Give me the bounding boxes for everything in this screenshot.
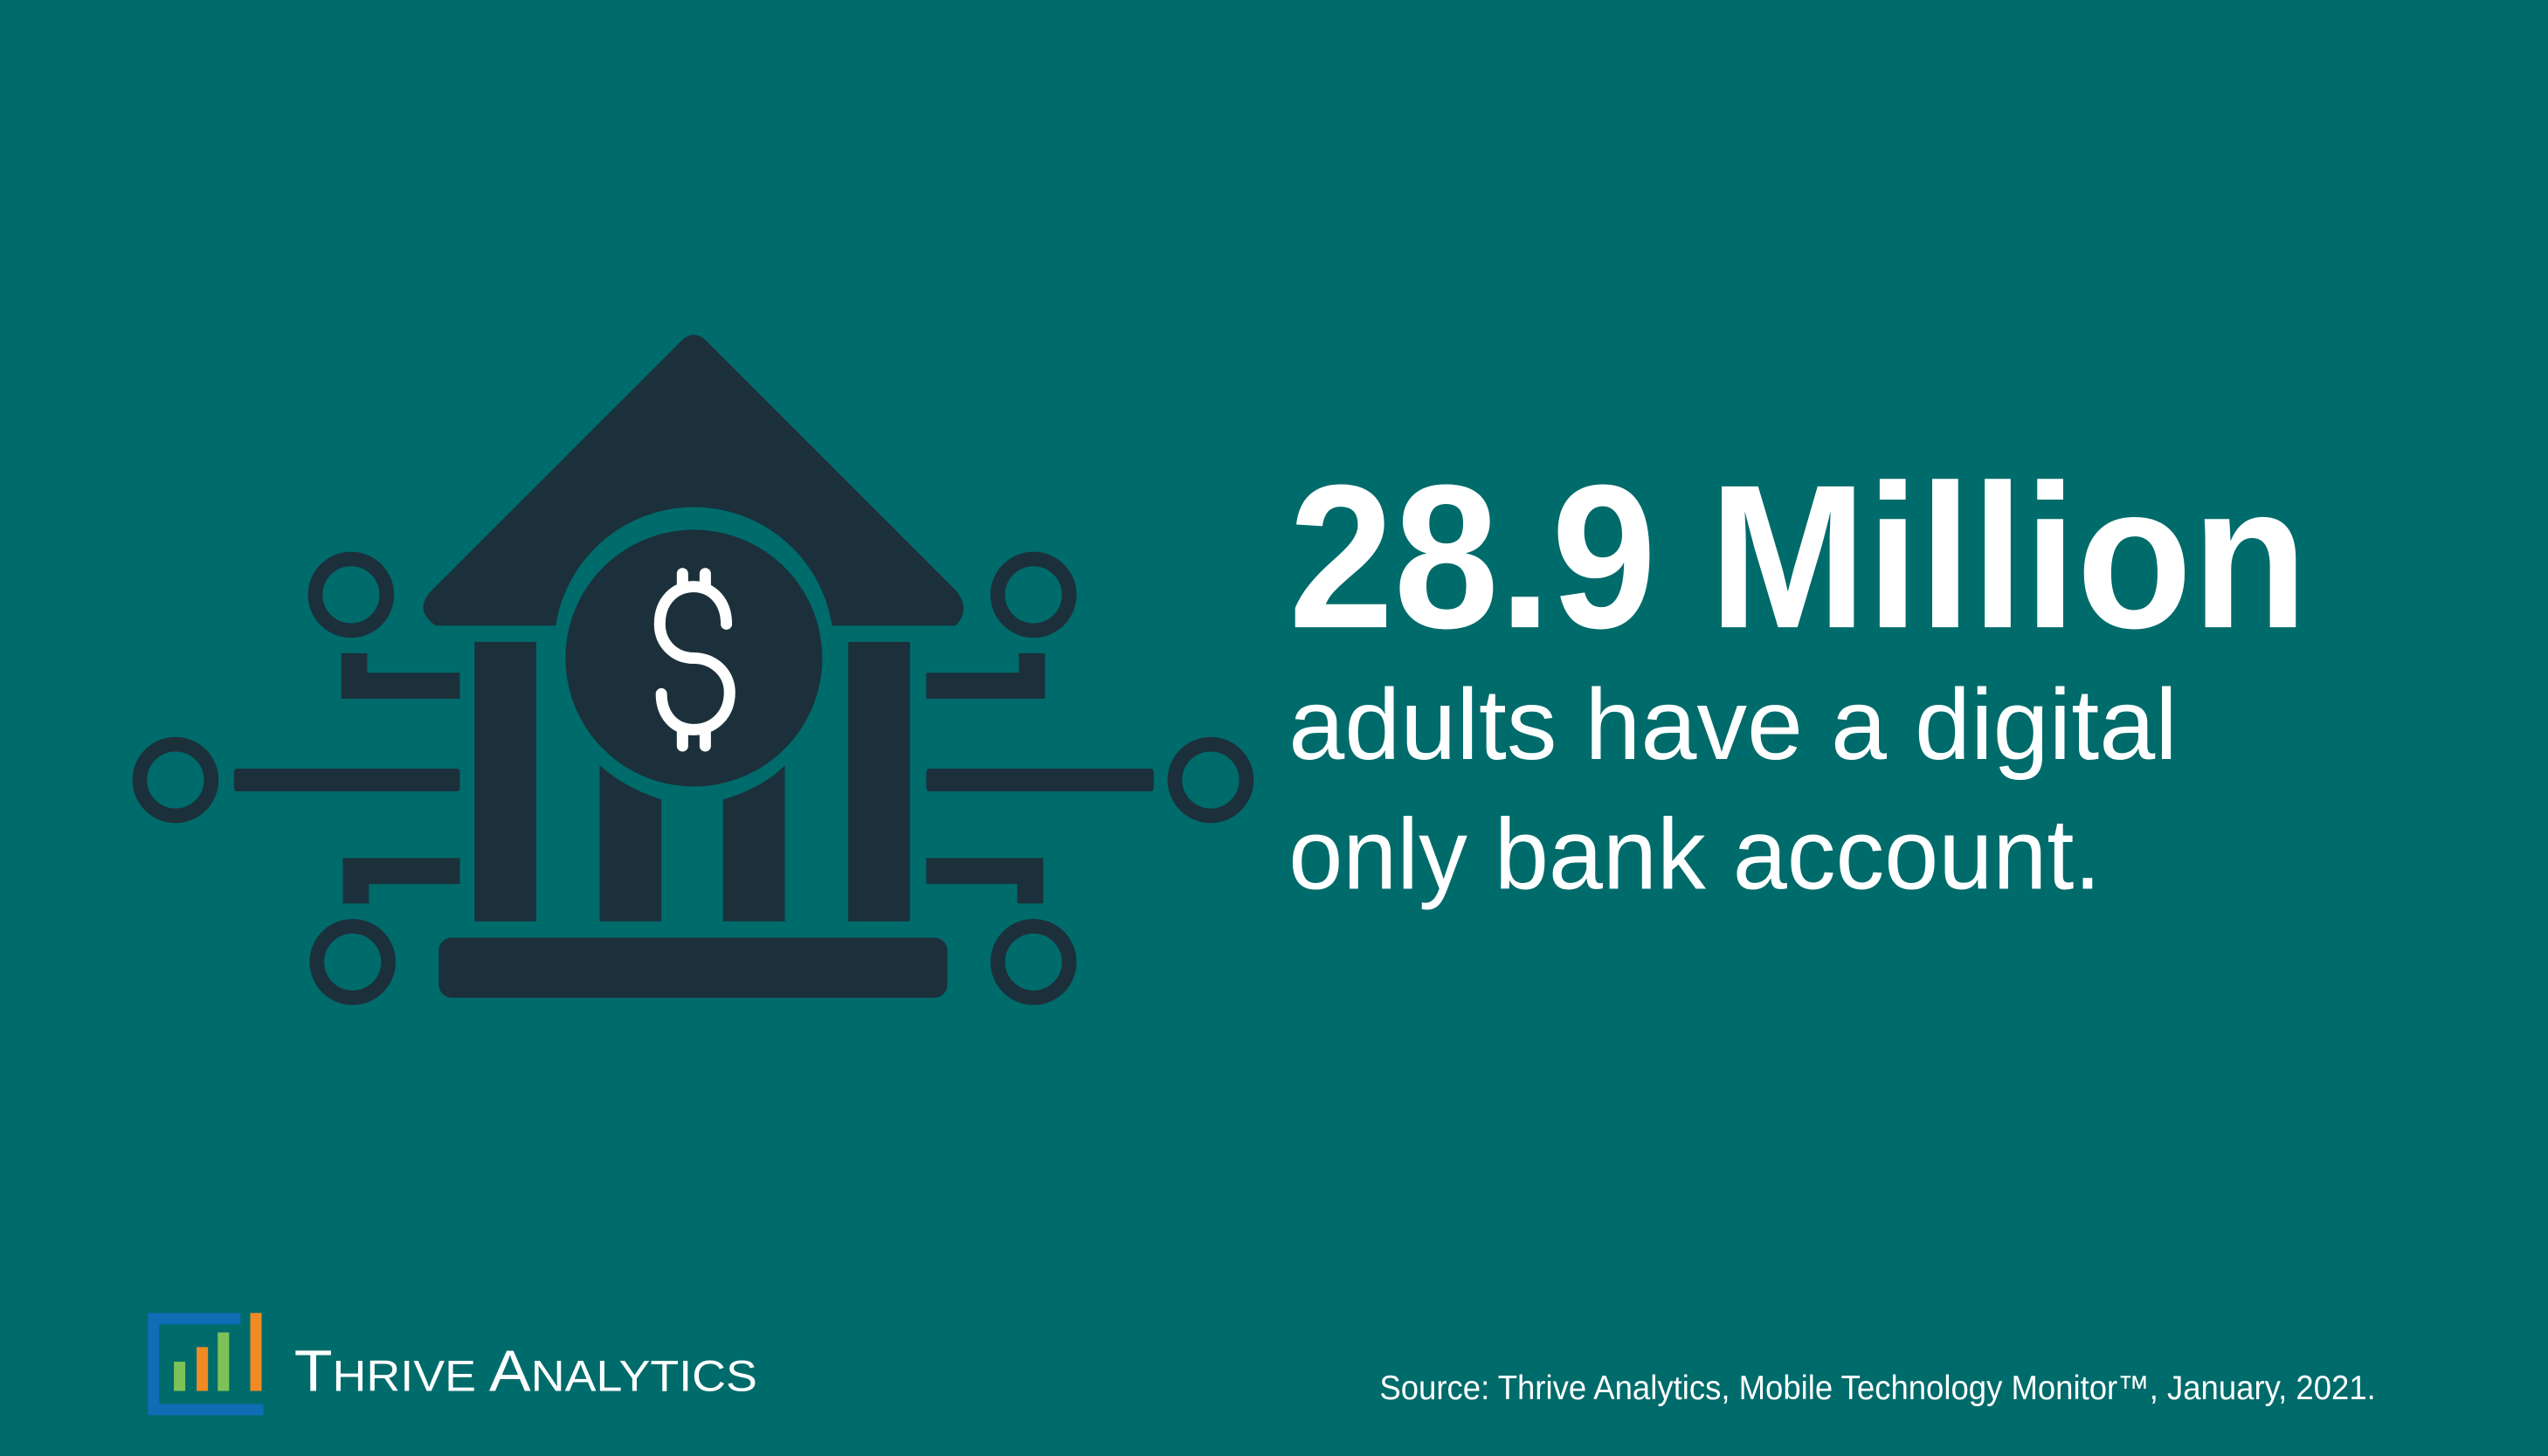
description text [1288, 669, 2178, 911]
logo wordmark: THRIVE ANALYTICS [294, 1339, 757, 1404]
logo: Thrive Analytics [148, 1313, 757, 1415]
circuit nodes [140, 559, 1246, 997]
columns [474, 642, 910, 921]
icon: dollar sign [659, 574, 729, 746]
description text: only bank account. [1288, 799, 2101, 911]
headline stat: 28.9 Million [1288, 442, 2308, 671]
circuit lines [234, 653, 1154, 903]
source note: Source: Thrive Analytics, Mobile Technology Monitor™, January, 2021. [1379, 1370, 2376, 1407]
coin circle [565, 530, 822, 786]
logo mark [148, 1313, 263, 1415]
roof [424, 335, 963, 625]
base [438, 937, 948, 997]
icon: digital bank [140, 335, 1246, 997]
description text: adults have a digital [1288, 669, 2178, 781]
